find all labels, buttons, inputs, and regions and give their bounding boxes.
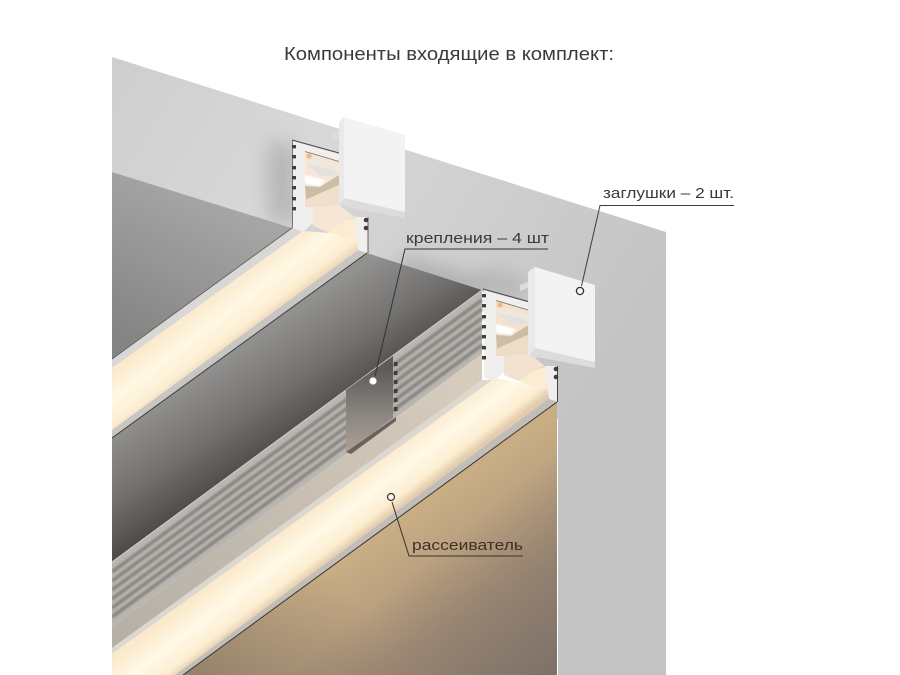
ceiling and wall surface (112, 57, 666, 675)
callout: mounting brackets (369, 231, 549, 385)
ribbed profile body (112, 290, 495, 654)
dark recess wall between fixtures (112, 253, 482, 562)
diffuser of first fixture (112, 221, 367, 438)
callout: diffuser (388, 494, 523, 556)
end cap two (520, 267, 595, 368)
title: Компоненты входящие в комплект: (284, 43, 614, 64)
end cap one (332, 117, 405, 218)
mounting clip (346, 356, 396, 454)
diffuser of second fixture (112, 371, 557, 675)
second fixture end view (482, 289, 558, 402)
dark recess above first fixture (112, 172, 292, 360)
warm lit wall (183, 402, 557, 675)
callout: end caps: заглушки – 2 шт. (603, 186, 734, 202)
callout: mounting brackets: крепления – 4 шт (406, 231, 549, 247)
callout: diffuser: рассеиватель (412, 538, 523, 554)
soft shadows on the ceiling (268, 140, 525, 300)
first fixture end view (292, 140, 368, 253)
callout: end caps (576, 186, 734, 295)
